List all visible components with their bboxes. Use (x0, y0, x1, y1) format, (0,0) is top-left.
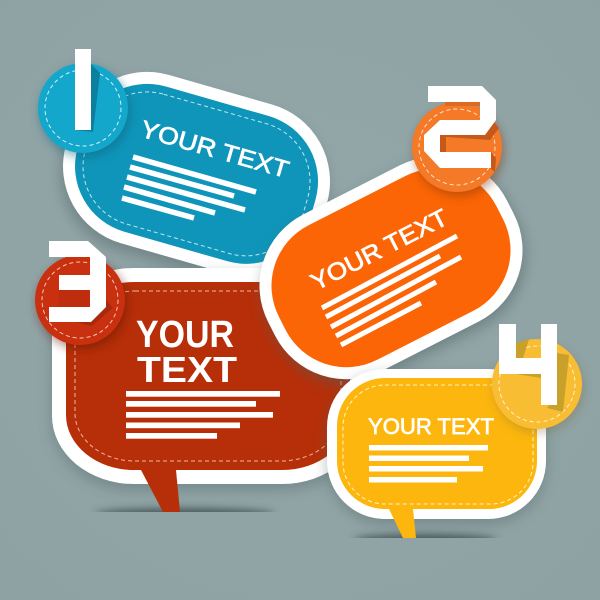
numeral 1 shape (75, 49, 91, 130)
heading: step 1 text: YOUR TEXT (137, 116, 292, 184)
badge: number 1 (38, 49, 130, 157)
heading: step 4 text: YOUR TEXT (368, 414, 494, 439)
panel: step 1 blue bubble (42, 53, 349, 302)
numeral 2 shape (424, 86, 496, 168)
heading: step 3 text: TEXT (137, 349, 237, 390)
panel: step 3 red bubble (52, 268, 364, 512)
badge: number 4 (492, 324, 584, 433)
heading: step 2 text: YOUR TEXT (306, 204, 453, 296)
numeral 4 shape (499, 324, 557, 405)
badge: number 2 (412, 86, 504, 196)
tail: yellow bubble (389, 509, 416, 538)
text lines: step 3 (126, 391, 280, 439)
panel: step 2 orange bubble (232, 129, 553, 412)
panel: step 4 yellow bubble (327, 369, 546, 538)
text lines: step 2 (322, 236, 461, 345)
badge: number 3 (35, 241, 127, 349)
text lines: step 4 (369, 445, 488, 482)
text lines: step 1 (122, 157, 256, 218)
ground shadow: yellow bubble (352, 529, 498, 538)
tail: red bubble (141, 470, 180, 512)
infographic canvas (31, 49, 588, 538)
ground shadow: red bubble (94, 503, 276, 512)
heading: step 3 text: YOUR (136, 314, 234, 356)
heading: step 3 text (136, 314, 237, 390)
numeral 3 shape (49, 241, 106, 322)
